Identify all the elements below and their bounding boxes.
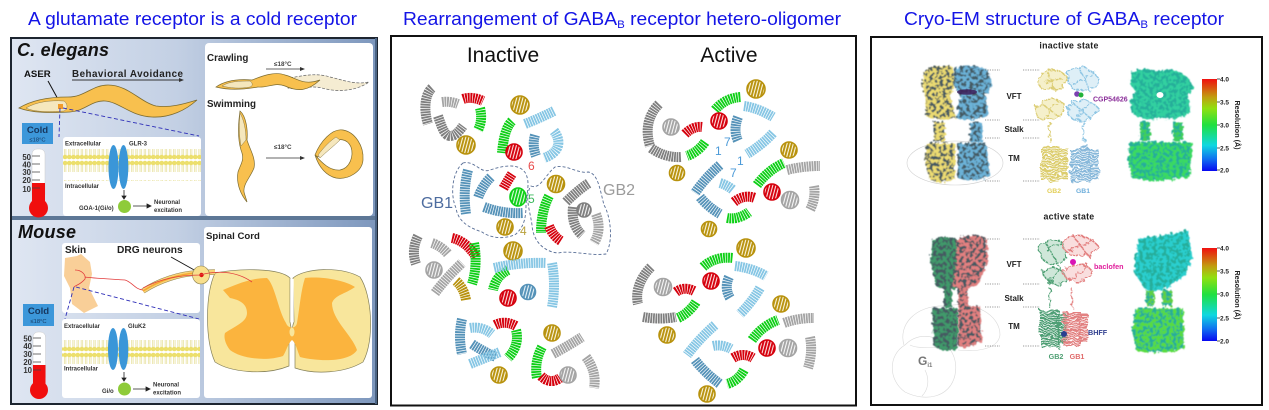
icon: crawling worm — [216, 74, 320, 90]
icon: thermometer mouse: 30 — [23, 350, 33, 359]
GB1 central subunit — [465, 170, 526, 235]
label: temperature arrow crawling: ≤18°C — [274, 60, 292, 68]
arrow: excitation — [133, 204, 151, 208]
label: CGP54626: CGP54626 — [1093, 96, 1128, 104]
label: GluK2: GluK2 — [128, 324, 146, 330]
label: helix 4: 4 — [520, 224, 527, 238]
label: baclofen: baclofen — [1094, 262, 1124, 271]
label: GB1: GB1 — [421, 195, 453, 212]
bottom-right subunit — [752, 296, 814, 368]
labels: helices 1 and 7: 7 — [730, 166, 737, 180]
label: neuronal excitation: excitation — [154, 208, 182, 214]
icon: receptor — [108, 328, 128, 370]
label: extracellular: Extracellular — [64, 324, 101, 330]
lower-centre subunit — [703, 239, 766, 314]
label: spinal cord: Spinal Cord — [206, 231, 260, 242]
colorbar inactive: 2.0 — [1220, 168, 1229, 174]
colorbar active — [1202, 246, 1229, 346]
ribbon: inactive GB2 — [1036, 70, 1067, 182]
group: inactive helix tetramers — [414, 88, 599, 388]
panel: cryo-EM structure — [871, 37, 1262, 405]
GB2 central subunit — [541, 176, 599, 243]
density map: active GB2 — [930, 237, 958, 351]
icon: thermometer: 30 — [22, 168, 32, 177]
icon: thermometer: 40 — [22, 160, 32, 170]
icon: thermometer: 50 — [22, 153, 32, 162]
icon: cold badge mouse — [23, 304, 54, 326]
cavity inactive — [1156, 92, 1164, 98]
title: cryo-EM structure: receptor — [1148, 8, 1224, 29]
label: Gi1: i1 — [927, 363, 933, 369]
icon: thermometer: 20 — [22, 176, 32, 185]
top-centre subunit — [711, 80, 773, 154]
icon: cold badge mouse: Cold — [28, 306, 49, 317]
lower-centre subunit — [493, 242, 554, 307]
colorbar active: 2.5 — [1220, 316, 1229, 322]
labels: helices 1 and 7: 1 — [737, 154, 744, 168]
bottom-left subunit — [460, 319, 517, 383]
arrow: ASER pointer — [48, 81, 59, 101]
title: cold receptor: A glutamate receptor is a cold receptor — [28, 8, 357, 29]
label: active GB2: GB2 — [1049, 352, 1063, 361]
label: active GB1: GB1 — [1070, 352, 1084, 361]
lower-left subunit — [414, 236, 476, 300]
label: GOA-1: GOA-1(Gi/o) — [79, 206, 114, 212]
bottom-left subunit — [687, 325, 753, 402]
icon: crawling ghost worm — [288, 75, 369, 90]
colorbar inactive: 3.0 — [1220, 122, 1229, 130]
ligand CGP54626 marker — [1074, 91, 1084, 98]
heading: C. elegans: C. elegans — [17, 40, 109, 60]
label: behavioral avoidance: Behavioral Avoidance — [72, 69, 184, 80]
label: GLR-3: GLR-3 — [129, 142, 148, 148]
labels: inactive domains: VFT — [1006, 92, 1022, 101]
colorbar active: 2.0 — [1220, 338, 1229, 346]
middle-right subunit — [757, 142, 820, 210]
label: inactive GB1: GB1 — [1076, 188, 1090, 195]
title: rearrangement: receptor hetero-oligomer — [625, 8, 841, 29]
dashed outline: GB1 — [453, 163, 528, 238]
labels: helices 1 and 7: 7 — [724, 135, 731, 149]
label: temperature arrow swimming — [266, 143, 305, 160]
top-left subunit — [648, 104, 705, 180]
label: Gi1: G — [918, 354, 927, 368]
label: Gi/o: Gi/o — [102, 389, 114, 395]
label: helix 6: 6 — [528, 159, 535, 173]
label: ASER: ASER — [24, 69, 51, 80]
colorbar active: 3.0 — [1220, 292, 1229, 298]
icon: thermometer mouse: 20 — [23, 358, 33, 367]
labels: active domains: VFT — [1006, 260, 1022, 269]
dotted guides active — [985, 239, 1040, 346]
top-left subunit — [425, 88, 483, 154]
label: GB2: GB2 — [603, 182, 635, 199]
label: temperature arrow swimming: ≤18°C — [274, 143, 292, 151]
icon: cold badge: Cold — [27, 125, 48, 136]
icon: worm — [19, 85, 197, 117]
labels: active domains: Stalk — [1004, 294, 1024, 303]
icon: thermometer — [22, 149, 48, 218]
ligand baclofen marker — [1070, 259, 1076, 265]
labels: active domains — [1004, 260, 1024, 331]
label: extracellular: Extracellular — [65, 142, 102, 148]
group: active helix tetramers — [637, 80, 820, 402]
arrow: DRG pointer — [171, 257, 200, 273]
heading: inactive state: inactive state — [1039, 40, 1099, 50]
bottom-right subunit — [536, 325, 595, 388]
dashed zoom lines skin — [65, 287, 199, 319]
title: rearrangement: Rearrangement of GABA — [403, 8, 607, 29]
colorbar inactive: 3.5 — [1220, 100, 1229, 106]
colorbar active: 3.5 — [1220, 268, 1229, 276]
resolution map active — [1132, 230, 1192, 353]
resolution map inactive — [1128, 69, 1194, 181]
dashed outline: GB2 — [528, 166, 610, 254]
middle-left subunit — [695, 165, 755, 236]
label: neuronal excitation: excitation — [153, 390, 181, 396]
label: intracellular: Intracellular — [65, 184, 100, 190]
labels: active domains: TM — [1008, 322, 1020, 331]
labels: inactive domains — [1004, 92, 1024, 163]
colorbar inactive: 4.0 — [1220, 76, 1229, 84]
top-centre subunit — [502, 96, 558, 160]
colorbar active: 4.0 — [1220, 246, 1229, 252]
label: skin: Skin — [65, 245, 86, 256]
icon: receptor — [108, 145, 128, 189]
panel: cold receptor biology — [11, 38, 377, 404]
dotted guides inactive — [985, 70, 1040, 181]
icon: thermometer mouse: 50 — [23, 334, 33, 344]
label: resolution active: Resolution (Å) — [1233, 270, 1242, 320]
ghost micelle inactive — [907, 141, 1003, 185]
colorbar inactive: 2.5 — [1220, 146, 1229, 152]
title: cryo-EM structure: B — [1140, 19, 1148, 31]
label: intracellular: Intracellular — [64, 366, 99, 372]
label: crawling: Crawling — [207, 53, 248, 64]
arrow: excitation — [133, 387, 150, 391]
ribbon: active GB2 — [1039, 240, 1066, 348]
title: rearrangement: B — [617, 19, 625, 31]
lower-left subunit — [637, 267, 696, 343]
card: GLR-3 membrane — [63, 137, 201, 216]
heading: inactive: Inactive — [467, 44, 539, 67]
icon: cold badge: ≤18°C — [29, 138, 46, 144]
icon: G protein — [118, 200, 131, 213]
label: temperature arrow crawling — [266, 60, 305, 71]
label: BHFF: BHFF — [1088, 328, 1108, 337]
dashed zoom lines — [59, 108, 199, 137]
arrow: receptor to G protein — [122, 372, 126, 381]
icon: G protein — [118, 382, 131, 396]
ribbon: active GB1 — [1062, 234, 1098, 346]
icon: cold badge — [22, 123, 53, 144]
labels: helices 1 and 7 — [715, 135, 744, 180]
icon: DRG axon and neuron — [74, 266, 252, 291]
labels: inactive domains: TM — [1008, 154, 1020, 163]
icon: thermometer mouse: 10 — [23, 366, 33, 375]
card: skin — [62, 243, 200, 313]
heading: active: Active — [700, 44, 758, 67]
labels: inactive domains: Stalk — [1004, 125, 1024, 134]
label: swimming: Swimming — [207, 99, 256, 110]
card: crawling and swimming — [205, 43, 373, 216]
density map: active GB1 — [952, 235, 988, 347]
icon: cold badge mouse: ≤18°C — [30, 319, 47, 325]
diagram: spinal cord section — [208, 270, 371, 372]
label: helix 5: 5 — [528, 192, 535, 206]
label: resolution inactive: Resolution (Å) — [1233, 100, 1242, 150]
ligand density — [957, 89, 977, 95]
ghost: G protein density — [892, 305, 1000, 397]
card: spinal cord — [204, 227, 372, 398]
icon: thermometer mouse — [23, 332, 48, 399]
arrow: receptor to G protein — [122, 190, 126, 199]
icon: curled worm — [315, 130, 363, 178]
icon: skin patch — [64, 254, 98, 313]
label: inactive GB2: GB2 — [1047, 188, 1061, 195]
labels: helices 1 and 7: 1 — [715, 144, 722, 158]
heading: active state: active state — [1044, 212, 1094, 222]
colorbar inactive — [1202, 76, 1229, 174]
density map: inactive GB1 — [954, 65, 992, 181]
icon: thermometer: 10 — [22, 185, 32, 194]
title: cryo-EM structure: Cryo-EM structure of GABA — [904, 8, 1130, 29]
heading: mouse: Mouse — [18, 222, 76, 242]
card: GluK2 membrane — [62, 319, 200, 398]
ribbon: inactive GB1 — [1068, 66, 1098, 182]
panel: GABAB rearrangement — [391, 36, 856, 406]
density map: inactive GB2 — [922, 66, 956, 183]
ligand BHFF marker — [1061, 331, 1067, 337]
label: neuronal excitation: Neuronal — [154, 200, 180, 206]
icon: swimming worm — [238, 111, 254, 202]
icon: thermometer mouse: 40 — [23, 342, 33, 351]
label: neuronal excitation: Neuronal — [153, 382, 179, 388]
label: DRG neurons: DRG neurons — [117, 245, 183, 256]
